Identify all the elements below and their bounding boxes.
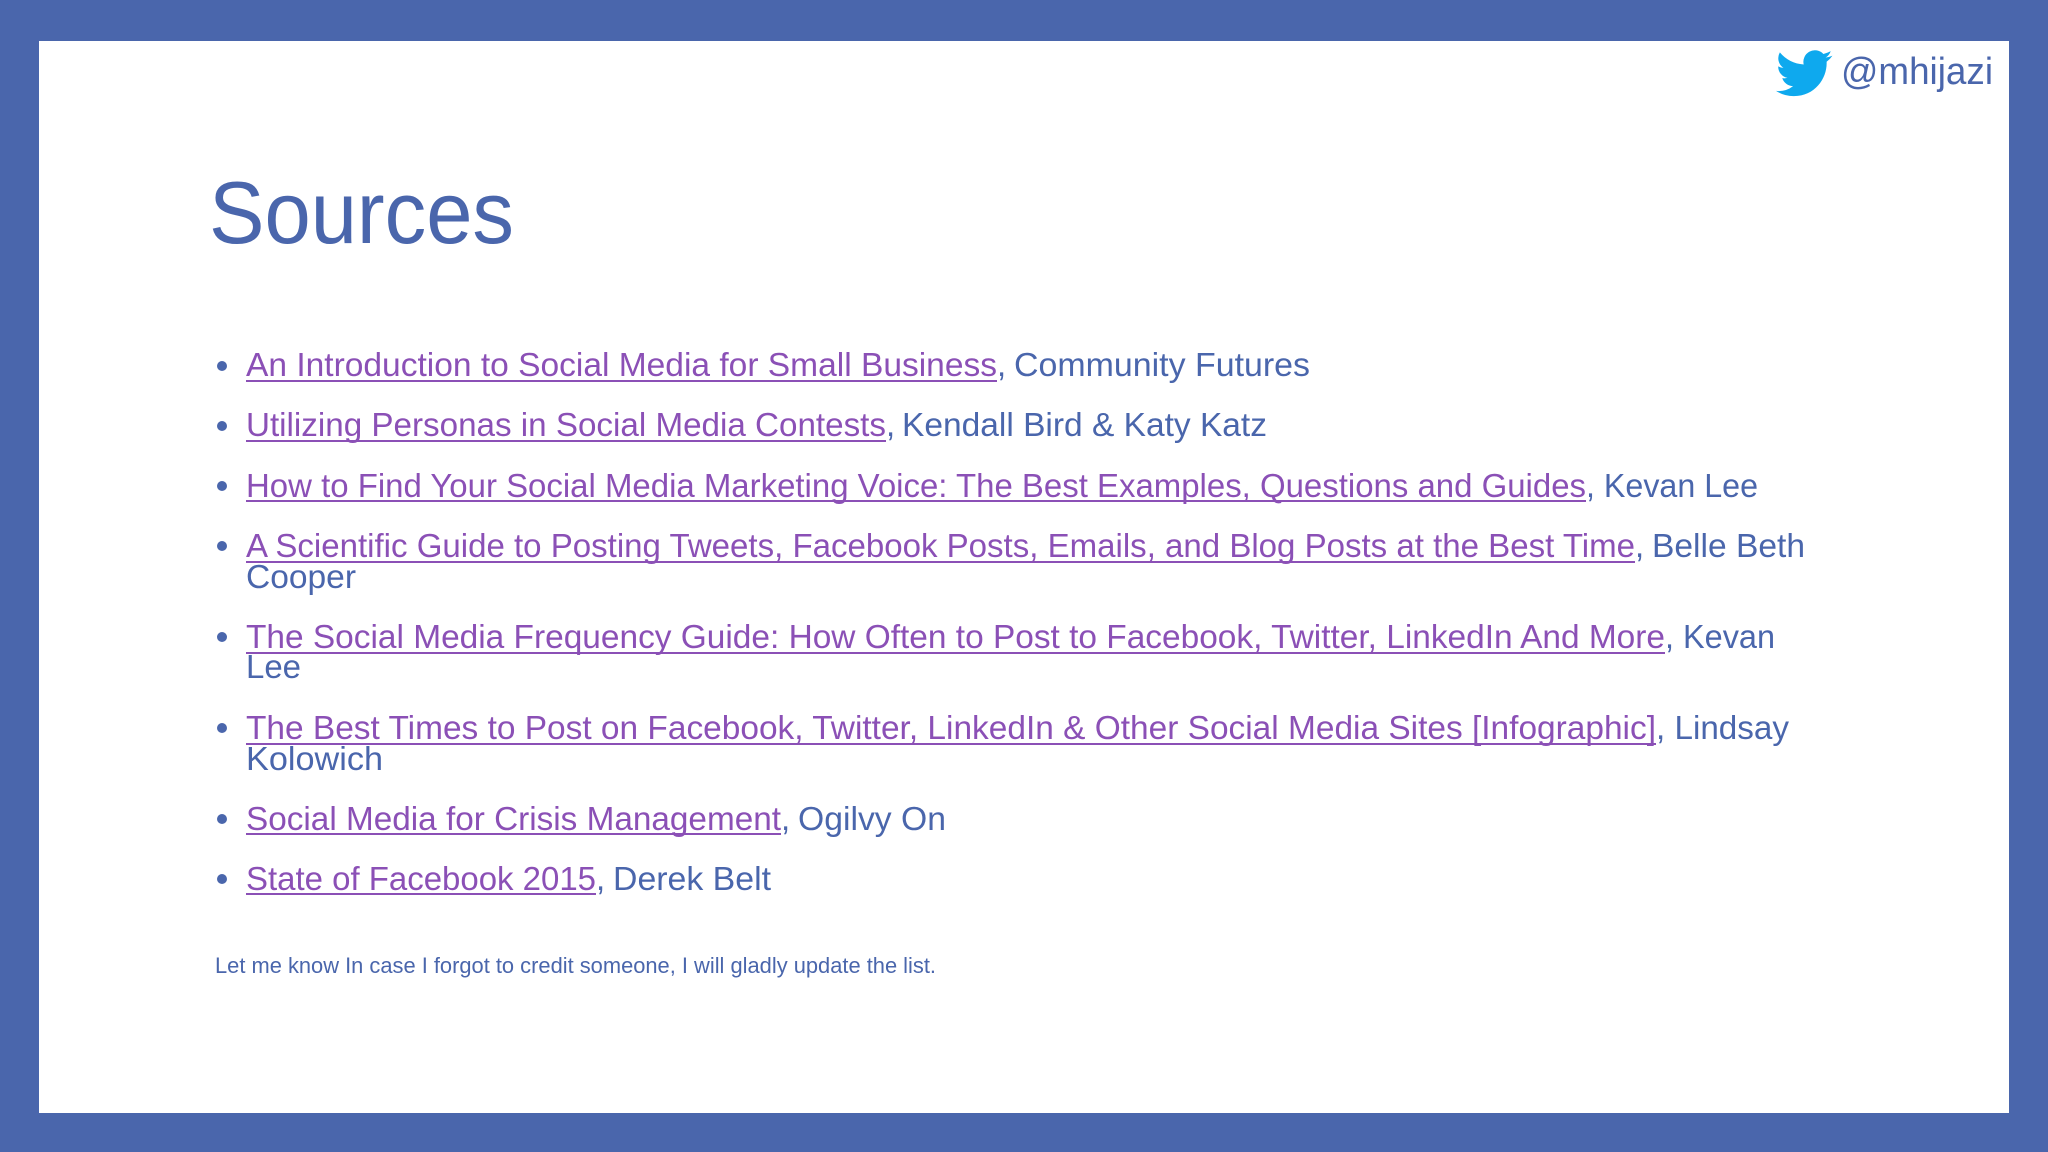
source item 5 — [217, 618, 1775, 685]
source item 6: Kolowich — [246, 740, 383, 777]
source item 6: , Lindsay — [1656, 709, 1789, 746]
source item 1: Community Futures — [1014, 346, 1310, 383]
source item 8: State of Facebook 2015 — [246, 860, 596, 897]
source item 1 — [217, 346, 1310, 383]
source item 2: , — [886, 406, 895, 443]
source item 7: Ogilvy On — [798, 800, 946, 837]
source item 2 — [217, 406, 1267, 443]
source item 1: , — [997, 346, 1006, 383]
source item 6: The Best Times to Post on Facebook, Twitter, LinkedIn & Other Social Media Sites [Infographic] — [246, 709, 1656, 746]
source item 4: A Scientific Guide to Posting Tweets, Facebook Posts, Emails, and Blog Posts at the Best Time — [246, 527, 1635, 564]
source item 4: , — [1635, 527, 1644, 564]
footnote: Let me know In case I forgot to credit someone, I will gladly update the list. — [215, 953, 936, 978]
source item 2: Utilizing Personas in Social Media Contests — [246, 406, 886, 443]
source item 8: Derek Belt — [613, 860, 771, 897]
source item 4 — [217, 527, 1805, 595]
source item 2: Kendall Bird & Katy Katz — [902, 406, 1267, 443]
source item 3: How to Find Your Social Media Marketing Voice: The Best Examples, Questions and Guides — [246, 467, 1586, 504]
source item 3: , Kevan Lee — [1586, 467, 1758, 504]
source item 8 — [217, 860, 771, 897]
source item 7: Social Media for Crisis Management — [246, 800, 781, 837]
source item 5: Lee — [246, 648, 301, 685]
source item 8: , — [596, 860, 605, 897]
source item 4: Belle Beth — [1652, 527, 1805, 564]
source item 1: An Introduction to Social Media for Small Business — [246, 346, 997, 383]
icon: twitter bird — [1776, 50, 1832, 96]
twitter handle: @mhijazi — [1841, 51, 1993, 93]
title: Sources — [209, 163, 514, 262]
source item 4: Cooper — [246, 558, 356, 595]
source item 5: The Social Media Frequency Guide: How Often to Post to Facebook, Twitter, LinkedIn And More — [246, 618, 1665, 655]
source item 6 — [217, 709, 1789, 777]
source item 5: , Kevan — [1665, 618, 1775, 655]
source item 7: , — [781, 800, 790, 837]
